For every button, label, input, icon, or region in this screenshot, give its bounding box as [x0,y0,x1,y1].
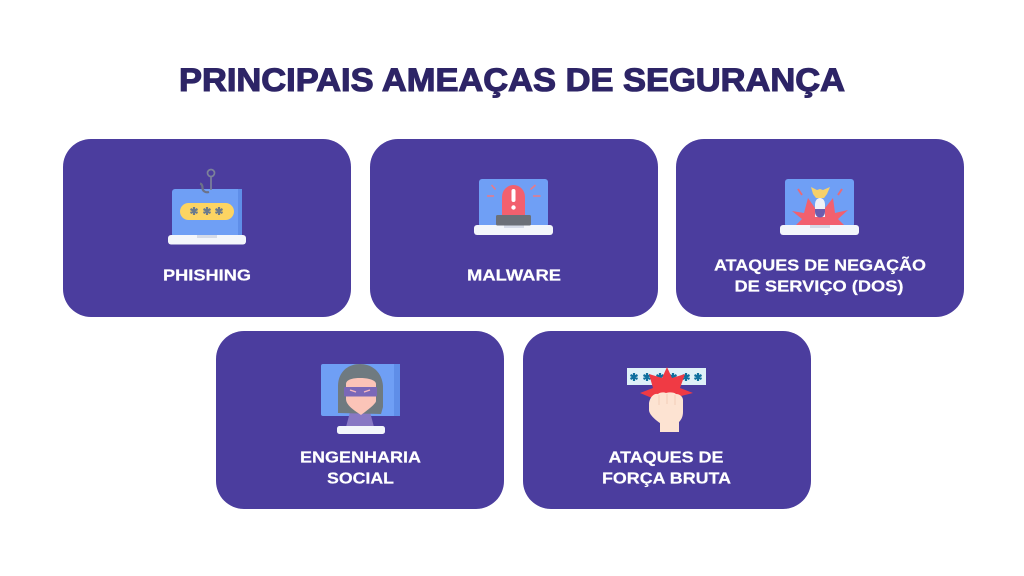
label: social engineering: ENGENHARIA [300,450,422,466]
icon: bomb explosion laptop [780,179,859,235]
panel: malware [370,139,658,317]
label: social engineering: SOCIAL [327,470,394,488]
icon: phishing laptop [168,170,246,244]
panel: denial of service [676,139,964,317]
label: denial of service: ATAQUES DE NEGAÇÃO [714,254,926,274]
panel: phishing [63,139,351,317]
icon: fist breaking password [627,367,706,432]
panel: brute force [523,331,811,509]
icon: masked figure monitor [321,364,400,434]
label: malware: MALWARE [467,268,561,284]
label: brute force: FORÇA BRUTA [602,470,731,488]
panel: social engineering [216,331,504,509]
label: denial of service: DE SERVIÇO (DOS) [734,278,904,296]
title: PRINCIPAIS AMEAÇAS DE SEGURANÇA [179,62,845,98]
label: social engineering [300,450,422,488]
icon: alarm siren laptop [474,179,553,235]
label: brute force [602,450,731,488]
label: phishing: PHISHING [163,268,251,284]
label: denial of service [714,254,926,296]
label: brute force: ATAQUES DE [608,450,724,466]
